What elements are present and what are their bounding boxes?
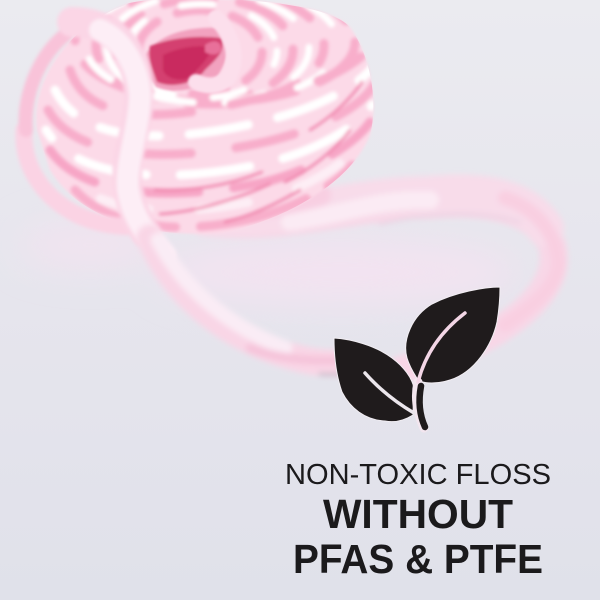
top face white plies — [85, 0, 339, 103]
left leaf — [334, 338, 414, 422]
front strand running to the leaf — [150, 238, 350, 374]
floss spool — [24, 0, 374, 255]
floss tail — [200, 194, 558, 370]
right leaf — [406, 287, 500, 383]
left leaf vein — [365, 373, 414, 413]
spool body — [36, 0, 373, 234]
spool wound strands — [46, 0, 374, 227]
stem — [420, 386, 425, 427]
caption line 1: NON-TOXIC FLOSS — [285, 459, 551, 491]
icon: leaves — [334, 287, 500, 428]
caption line 2: WITHOUT — [323, 491, 513, 537]
caption — [285, 459, 551, 582]
side rows — [48, 50, 374, 227]
right leaf vein — [418, 313, 465, 382]
fine dark pink fibres — [155, 82, 362, 222]
spool centre hole — [145, 28, 229, 90]
side white plies — [46, 68, 372, 210]
front looping strand — [24, 22, 165, 255]
stem outline — [416, 382, 424, 428]
top face windings — [75, 0, 355, 104]
caption line 3: PFAS & PTFE — [293, 536, 543, 582]
soft pink glow on the surface — [20, 223, 520, 304]
free strand end inside hole — [196, 18, 234, 85]
